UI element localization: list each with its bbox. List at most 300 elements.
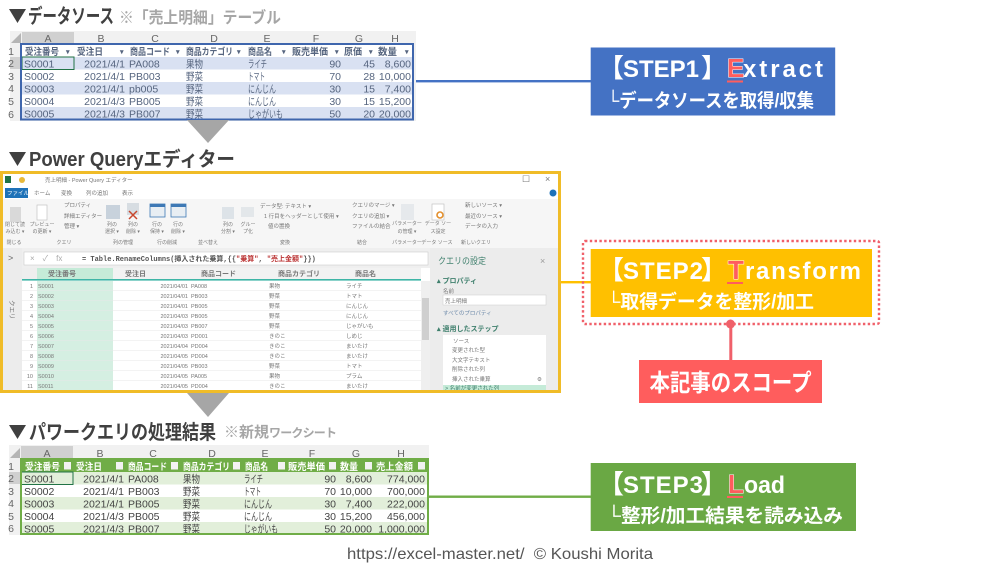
data grid: 7 <box>30 344 33 350</box>
ribbon: み込む ▾ <box>6 228 25 235</box>
step 2 heading: STEP2 <box>623 258 703 285</box>
data grid: まいたけ <box>346 353 369 360</box>
data rows: 20 <box>363 108 375 120</box>
heading: power query result <box>9 421 337 444</box>
data grid: きのこ <box>269 343 286 350</box>
data grid: S0004 <box>38 314 54 320</box>
ribbon: ファイル <box>7 190 30 197</box>
data grid: S0006 <box>38 334 54 340</box>
ribbon: の管理 ▾ <box>398 228 417 235</box>
ribbon: プ化 <box>243 228 253 235</box>
data rows: 1,000,000 <box>378 524 425 536</box>
column letters <box>43 448 405 460</box>
data rows: 野菜 <box>183 511 200 523</box>
query settings pane: 売上明細 <box>445 297 468 305</box>
ribbon: 保持 ▾ <box>150 228 164 235</box>
query settings pane: × <box>540 256 545 266</box>
data rows: 2021/4/3 <box>84 108 125 120</box>
column letters: B <box>96 448 104 460</box>
ribbon labels: 値の置換 <box>268 222 291 230</box>
connector: step 2 <box>560 281 591 283</box>
step 1 heading: 【 <box>598 53 624 83</box>
data rows: 8,600 <box>385 58 411 70</box>
data grid: 受注日 <box>125 269 146 278</box>
query settings pane: クエリの設定 <box>438 256 486 266</box>
data grid: 2021/04/03 <box>160 314 188 320</box>
column letters: G <box>352 448 360 460</box>
data rows: 7,400 <box>346 498 372 510</box>
data rows: PB003 <box>128 486 160 498</box>
data rows: 果物 <box>186 58 203 70</box>
ribbon: 並べ替え <box>198 239 218 246</box>
data rows: 2021/4/1 <box>83 474 124 486</box>
step 3 heading: oad <box>744 472 785 499</box>
ribbon: パラメーター <box>392 220 422 227</box>
data rows <box>24 58 411 120</box>
row numbers <box>8 46 14 121</box>
data grid: S0003 <box>38 304 54 310</box>
step 2 heading: 【 <box>598 255 624 285</box>
data rows: 2021/4/1 <box>83 486 124 498</box>
row numbers: 1 <box>8 461 14 473</box>
data rows: にんじん <box>244 511 272 523</box>
step 3 description: └整形/加工結果を読み込み <box>607 504 843 527</box>
data grid: 商品カテゴリ <box>278 269 320 278</box>
data rows: 90 <box>324 474 336 486</box>
data rows: 15 <box>363 84 375 96</box>
header row: 商品カテゴリ <box>186 46 233 58</box>
step 2 heading: T <box>728 255 744 285</box>
data rows: 2021/4/1 <box>84 71 125 83</box>
formula bar <box>22 248 430 268</box>
header row: ▾ <box>368 49 373 56</box>
data rows: じゃがいも <box>248 108 283 120</box>
data rows: PB007 <box>128 524 160 536</box>
query settings pane: ソース <box>453 338 469 345</box>
query settings pane: > 名前が変更された列 <box>445 384 500 392</box>
row numbers: 2 <box>8 473 14 485</box>
data grid: 果物 <box>269 282 281 290</box>
data grid: じゃがいも <box>346 322 374 330</box>
data rows: 2021/4/3 <box>83 511 124 523</box>
data grid: PB007 <box>191 324 208 330</box>
step 3 heading: 】 <box>701 469 727 499</box>
query settings pane: 変更された型 <box>452 346 486 354</box>
row numbers: 5 <box>8 96 14 108</box>
data grid: S0007 <box>38 344 54 350</box>
step 1 heading: 】 <box>701 53 727 83</box>
data rows: PA008 <box>128 474 159 486</box>
data rows: 70 <box>324 486 336 498</box>
column letters: A <box>44 33 52 45</box>
ribbon: 表示 <box>122 189 134 197</box>
data rows: にんじん <box>248 96 276 108</box>
column letters: F <box>313 33 319 45</box>
data rows: じゃがいも <box>244 522 278 536</box>
data grid: 4 <box>30 314 33 320</box>
column letters: C <box>149 448 157 460</box>
row numbers: 5 <box>8 511 14 523</box>
data rows: 7,400 <box>385 84 411 96</box>
data grid: 10 <box>27 374 33 380</box>
query settings pane: ▴ プロパティ <box>436 277 477 285</box>
data rows: 90 <box>329 58 341 70</box>
data grid: PA005 <box>191 374 207 380</box>
ribbon labels: データ型: テキスト ▾ <box>260 202 311 210</box>
data grid: S0011 <box>38 384 54 390</box>
column letters: D <box>208 448 216 460</box>
row numbers: 6 <box>8 109 14 121</box>
data rows <box>24 472 425 536</box>
data rows: 2021/4/3 <box>83 524 124 536</box>
data grid: にんじん <box>346 303 369 310</box>
heading: power query editor: Power Queryエディター <box>29 147 235 171</box>
data grid: しめじ <box>346 333 363 340</box>
step 3 heading: L <box>728 469 744 499</box>
data grid: まいたけ <box>346 383 369 390</box>
row numbers: 4 <box>8 83 14 95</box>
data rows: 2021/4/1 <box>84 58 125 70</box>
data rows: 50 <box>324 524 336 536</box>
step 3 heading: STEP3 <box>623 472 703 499</box>
data grid: 8 <box>30 354 33 360</box>
header row: 商品名 <box>248 46 272 58</box>
heading: data source <box>9 4 281 28</box>
header row: ▾ <box>175 49 180 56</box>
query settings pane: ▴ 適用したステップ <box>436 324 498 333</box>
ribbon: 結合 <box>357 239 367 246</box>
ribbon: 分割 ▾ <box>221 228 235 235</box>
header row: ▾ <box>404 49 409 56</box>
step 1 heading <box>598 53 823 83</box>
data grid: PB005 <box>191 314 208 320</box>
data grid: PD004 <box>191 344 208 350</box>
data rows: 30 <box>329 84 341 96</box>
arrow: editor to result <box>187 393 229 417</box>
panel: step 3 load <box>591 463 856 531</box>
query settings pane: 挿入された乗算 <box>452 375 491 383</box>
row numbers: 2 <box>8 58 14 70</box>
row numbers: 3 <box>8 486 14 498</box>
data rows: 15,200 <box>340 511 372 523</box>
data grid: PB005 <box>191 304 208 310</box>
data rows: 700,000 <box>387 486 425 498</box>
arrow: source to editor <box>187 120 229 143</box>
column letters: E <box>261 448 269 460</box>
data grid: 2021/04/05 <box>160 384 188 390</box>
data rows: 野菜 <box>183 524 200 536</box>
ribbon: データ ソース <box>421 239 453 246</box>
header row: 数量 <box>378 46 397 58</box>
header row: 販売単価 <box>288 461 325 473</box>
ribbon <box>3 174 558 248</box>
data rows: 20,000 <box>379 108 411 120</box>
heading: power query result: パワークエリの処理結果 <box>29 421 216 444</box>
ribbon: データ ソー <box>425 220 451 227</box>
data rows: 野菜 <box>186 71 203 83</box>
connector: step 1 <box>414 80 591 82</box>
data grid: 野菜 <box>269 302 281 310</box>
table: source excel sheet <box>8 31 416 121</box>
data rows: にんじん <box>244 498 272 510</box>
data rows: PB007 <box>129 108 161 120</box>
data grid: プラム <box>346 373 363 380</box>
data grid: S0009 <box>38 364 54 370</box>
query sidebar <box>3 248 22 390</box>
ribbon labels: プロパティ <box>64 202 91 209</box>
row numbers: 3 <box>8 71 14 83</box>
column letters: B <box>97 33 105 45</box>
ribbon: ホーム <box>34 190 51 197</box>
step 1 description: └データソースを取得/収集 <box>607 89 814 112</box>
query settings pane: 削除された列 <box>452 365 486 373</box>
query settings pane: ⚙ <box>537 376 542 383</box>
data grid: S0005 <box>38 324 54 330</box>
data rows: 10,000 <box>340 486 372 498</box>
header row: 受注番号 <box>25 461 60 473</box>
ribbon: 閉じて読 <box>5 221 25 228</box>
panel: power query editor window: クエリ <box>8 300 16 320</box>
data rows: PB003 <box>129 71 161 83</box>
data rows: 30 <box>324 511 336 523</box>
data rows: S0005 <box>24 524 55 536</box>
ribbon: プレビュー <box>29 221 55 228</box>
ribbon: ス設定 <box>430 228 446 235</box>
data rows: 2021/4/3 <box>84 96 125 108</box>
step 2 description: └取得データを整形/加工 <box>607 290 814 313</box>
ribbon labels: クエリの追加 ▾ <box>352 212 390 220</box>
header row: ▾ <box>334 49 339 56</box>
ribbon labels: データの入力 <box>465 222 498 230</box>
ribbon: 列の <box>107 221 117 228</box>
header row: 売上金額 <box>376 461 413 473</box>
data rows: ライチ <box>244 474 263 486</box>
ribbon: ☐ <box>522 174 530 184</box>
data rows: S0003 <box>24 498 55 510</box>
ribbon: 列の <box>128 221 138 228</box>
data rows: 30 <box>324 498 336 510</box>
data rows: 野菜 <box>186 96 203 108</box>
data rows: 30 <box>329 96 341 108</box>
data rows: 2021/4/1 <box>83 498 124 510</box>
ribbon: 削除 ▾ <box>126 228 140 235</box>
panel: step 1 extract <box>591 48 835 116</box>
panel: power query editor window <box>2 172 560 392</box>
ribbon: × <box>545 174 550 184</box>
query settings pane: 名前 <box>443 287 455 295</box>
data grid: 6 <box>30 334 33 340</box>
footer credit: https://excel-master.net/ © Koushi Morita <box>347 546 653 563</box>
data grid: 2021/04/03 <box>160 334 188 340</box>
data rows: 45 <box>363 58 375 70</box>
step 1 heading: xtract <box>743 56 823 83</box>
ribbon: 新しいクエリ <box>461 239 491 246</box>
data rows: pb005 <box>129 84 158 96</box>
data rows: S0002 <box>24 486 55 498</box>
data rows: 野菜 <box>183 486 200 498</box>
ribbon: クエリ <box>56 240 72 246</box>
data grid: ライチ <box>346 283 363 290</box>
ribbon labels: 詳細エディター <box>64 212 102 220</box>
data rows: S0005 <box>24 108 55 120</box>
header row: 商品カテゴリ <box>183 461 230 473</box>
data grid: 野菜 <box>269 362 281 370</box>
ribbon labels: 新しいソース ▾ <box>465 201 502 209</box>
column letters: H <box>391 33 399 45</box>
data rows: S0001 <box>24 474 55 486</box>
data rows: 野菜 <box>183 498 200 510</box>
data rows: 15,200 <box>379 96 411 108</box>
ribbon: 削除 ▾ <box>171 228 185 235</box>
data grid: S0010 <box>38 374 54 380</box>
table: result excel sheet <box>8 445 429 536</box>
data grid: PA008 <box>191 284 207 290</box>
data grid: S0002 <box>38 294 54 300</box>
data rows: S0002 <box>24 71 55 83</box>
ribbon: 列の管理 <box>113 239 133 246</box>
data grid: PB003 <box>191 294 208 300</box>
data grid: 2021/04/05 <box>160 374 188 380</box>
header row: 商品名 <box>245 461 268 473</box>
connector: step 3 <box>429 496 591 498</box>
ribbon: 列の <box>223 221 233 228</box>
ribbon labels: ファイルの結合 <box>352 222 391 230</box>
ribbon: グルー <box>240 221 256 228</box>
data rows: 10,000 <box>379 71 411 83</box>
ribbon: の更新 ▾ <box>33 228 52 235</box>
data rows: 70 <box>329 71 341 83</box>
data grid: 受注番号 <box>48 269 76 278</box>
column letters: A <box>43 448 51 460</box>
data rows: PA008 <box>129 58 160 70</box>
column letters: F <box>309 448 315 460</box>
data grid: 野菜 <box>269 322 281 330</box>
query settings pane: 大文字テキスト <box>452 356 490 364</box>
row numbers: 4 <box>8 498 14 510</box>
header row: 販売単価 <box>292 46 328 58</box>
data grid: 2021/04/05 <box>160 364 188 370</box>
ribbon: 行の削減 <box>157 239 177 246</box>
data rows: 2021/4/1 <box>84 84 125 96</box>
data grid: きのこ <box>269 383 286 390</box>
ribbon labels: 管理 ▾ <box>64 222 80 230</box>
data rows: S0004 <box>24 511 55 523</box>
header row: 受注日 <box>76 461 102 473</box>
data grid: 2 <box>30 294 33 300</box>
column letters: G <box>355 33 363 45</box>
data rows: S0001 <box>24 58 55 70</box>
data rows: 456,000 <box>387 511 425 523</box>
heading: data source: ※「売上明細」テーブル <box>119 8 281 27</box>
panel: power query editor window: × ✓ fx <box>30 254 62 263</box>
header row: ▾ <box>281 49 286 56</box>
step 1 heading: STEP1 <box>623 56 699 83</box>
data grid: 5 <box>30 324 33 330</box>
step 2 heading: ransform <box>745 258 861 285</box>
heading: data source: データソース <box>28 4 114 28</box>
data grid: トマト <box>346 363 363 370</box>
data rows: 果物 <box>183 472 200 486</box>
panel: step 2 transform <box>591 249 872 317</box>
row numbers <box>8 461 14 535</box>
data grid: S0001 <box>38 284 54 290</box>
data grid: 2021/04/01 <box>160 304 188 310</box>
data grid: 野菜 <box>269 292 281 300</box>
data grid: 1 <box>30 284 33 290</box>
query settings pane <box>430 248 558 392</box>
data rows: 28 <box>363 71 375 83</box>
row numbers: 6 <box>8 523 14 535</box>
ribbon: 選択 ▾ <box>105 228 119 235</box>
data grid: トマト <box>346 293 363 300</box>
step 1 heading: E <box>727 53 744 83</box>
column letters: E <box>263 33 271 45</box>
data rows: PB005 <box>128 498 160 510</box>
ribbon labels <box>64 201 502 230</box>
ribbon: 変換 <box>280 239 290 246</box>
data rows: PB005 <box>129 96 161 108</box>
data grid: 2021/04/05 <box>160 354 188 360</box>
data grid: 2021/04/01 <box>160 284 188 290</box>
data grid: 11 <box>27 384 33 390</box>
ribbon: 閉じる <box>6 240 22 246</box>
data grid: PB003 <box>191 364 208 370</box>
header row <box>25 461 425 473</box>
data rows: S0003 <box>24 84 55 96</box>
column letters: C <box>151 33 159 45</box>
header row: 数量 <box>340 461 358 473</box>
column letters <box>44 33 399 45</box>
data grid: 3 <box>30 304 33 310</box>
dotted scope frame <box>583 241 879 324</box>
data grid: S0008 <box>38 354 54 360</box>
ribbon labels: 1 行目をヘッダーとして使用 ▾ <box>264 212 339 220</box>
header row: ▾ <box>65 49 70 56</box>
header row: ▾ <box>119 49 124 56</box>
row numbers: 1 <box>8 46 14 58</box>
data grid: 2021/04/04 <box>160 344 188 350</box>
data grid: 2021/04/03 <box>160 324 188 330</box>
ribbon: 行の <box>152 221 162 228</box>
data grid: きのこ <box>269 353 286 360</box>
data rows: トマト <box>248 71 265 83</box>
data grid: まいたけ <box>346 343 369 350</box>
data rows: にんじん <box>248 84 276 96</box>
data rows: 野菜 <box>186 84 203 96</box>
step 2 heading: 】 <box>701 255 727 285</box>
step 3 heading: 【 <box>598 469 624 499</box>
data rows: PB005 <box>128 511 160 523</box>
data grid <box>22 268 430 390</box>
data rows: 20,000 <box>340 524 372 536</box>
data rows: トマト <box>244 486 261 498</box>
header row: 受注番号 <box>25 46 59 58</box>
data rows: ライチ <box>248 58 267 70</box>
data grid: 商品名 <box>355 269 376 278</box>
data rows: S0004 <box>24 96 55 108</box>
header row: 商品コード <box>128 461 167 473</box>
data rows: 15 <box>363 96 375 108</box>
data grid: 商品コード <box>201 269 236 278</box>
ribbon: パラメーター <box>392 239 422 246</box>
data grid: 果物 <box>269 372 281 380</box>
header row: 原価 <box>344 46 362 58</box>
ribbon: 行の <box>173 221 183 228</box>
data rows: 222,000 <box>387 498 425 510</box>
ribbon labels: 最近のソース ▾ <box>465 212 502 220</box>
data grid: にんじん <box>346 313 369 320</box>
data grid: 野菜 <box>269 312 281 320</box>
